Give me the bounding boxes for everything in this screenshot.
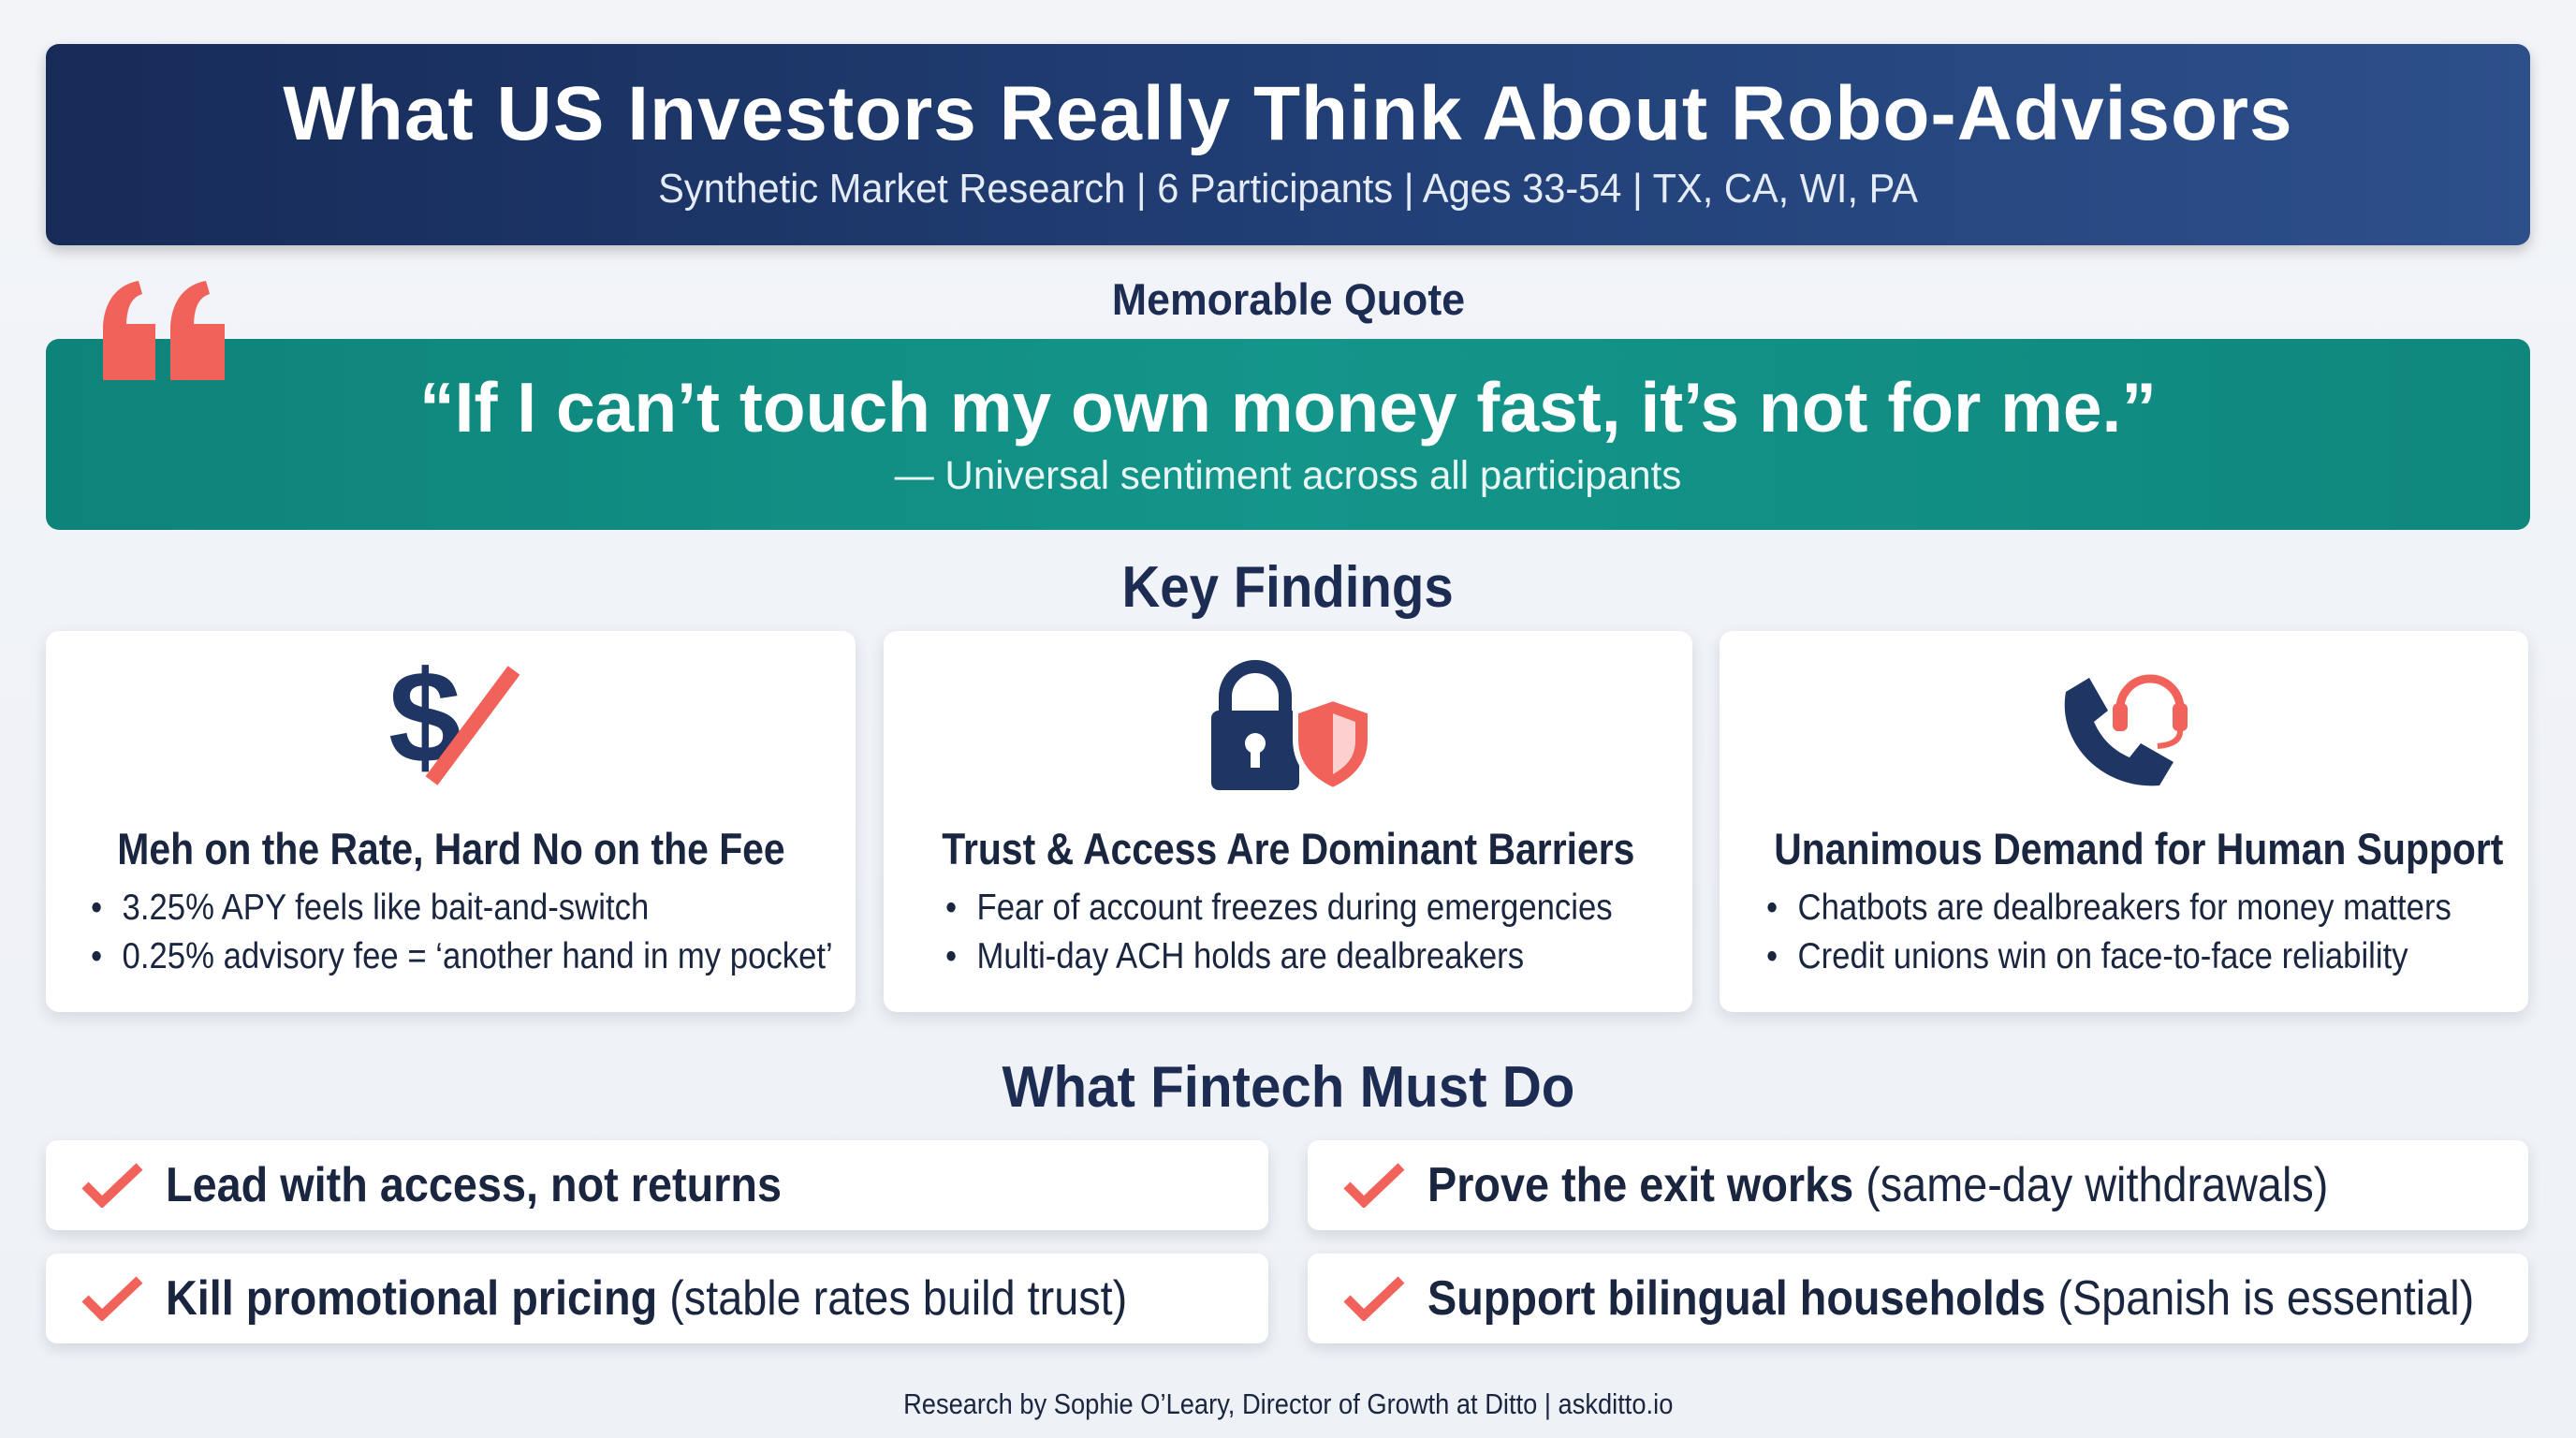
attribution: — Universal sentiment across all participants xyxy=(895,453,1681,498)
action: lead with access xyxy=(46,1140,1268,1230)
action: kill promotional pricing xyxy=(46,1254,1268,1343)
action: prove exit works xyxy=(1308,1140,2528,1230)
action: bilingual xyxy=(1308,1254,2528,1343)
card title: Unanimous Demand for Human Support xyxy=(1774,824,2503,873)
icon: check xyxy=(82,1276,142,1321)
icon: lock and shield xyxy=(1211,660,1368,790)
heading: what fintech must do: What Fintech Must Do xyxy=(1002,1055,1574,1120)
action: kill promotional pricing: Kill promotional pricing (stable rates build trust) xyxy=(166,1271,1127,1326)
card: rate and fee xyxy=(46,631,856,1012)
card title: Meh on the Rate, Hard No on the Fee xyxy=(117,824,784,873)
card: human support xyxy=(1720,631,2528,1012)
bullets: Chatbots are dealbreakers for money matters xyxy=(1798,888,2452,928)
bullets: Fear of account freezes during emergencies xyxy=(977,888,1613,928)
bullets xyxy=(1767,888,2452,976)
action: lead with access: Lead with access, not returns xyxy=(166,1158,782,1212)
header banner xyxy=(46,44,2530,245)
icon: dollar slash xyxy=(388,650,520,790)
bullets xyxy=(946,888,1613,976)
footer credit: Research by Sophie O’Leary, Director of Growth at Ditto | askditto.io xyxy=(903,1387,1673,1420)
quote panel xyxy=(46,339,2530,530)
title: What US Investors Really Think About Robo-Advisors xyxy=(283,71,2293,156)
bullets: 0.25% advisory fee = ‘another hand in my pocket’ xyxy=(123,936,833,976)
icon: quote marks xyxy=(103,281,225,380)
action: bilingual: Support bilingual households (Spanish is essential) xyxy=(1427,1271,2474,1326)
bullets: Multi-day ACH holds are dealbreakers xyxy=(977,936,1524,976)
icon: check xyxy=(82,1163,142,1208)
bullets: 3.25% APY feels like bait-and-switch xyxy=(123,888,649,928)
card title: Trust & Access Are Dominant Barriers xyxy=(942,824,1634,873)
heading: memorable quote: Memorable Quote xyxy=(1111,274,1465,324)
bullets xyxy=(92,888,833,976)
heading: key findings: Key Findings xyxy=(1122,555,1454,620)
bullets: Credit unions win on face-to-face reliability xyxy=(1798,936,2408,976)
quote text: “If I can’t touch my own money fast, it’s not for me.” xyxy=(419,368,2157,447)
card: trust and access xyxy=(884,631,1692,1012)
icon: phone headset xyxy=(2065,674,2188,786)
action: prove exit works: Prove the exit works (same-day withdrawals) xyxy=(1427,1158,2328,1212)
subtitle: Synthetic Market Research | 6 Participants | Ages 33-54 | TX, CA, WI, PA xyxy=(658,166,1918,212)
icon: check xyxy=(1344,1163,1404,1208)
icon: check xyxy=(1344,1276,1404,1321)
